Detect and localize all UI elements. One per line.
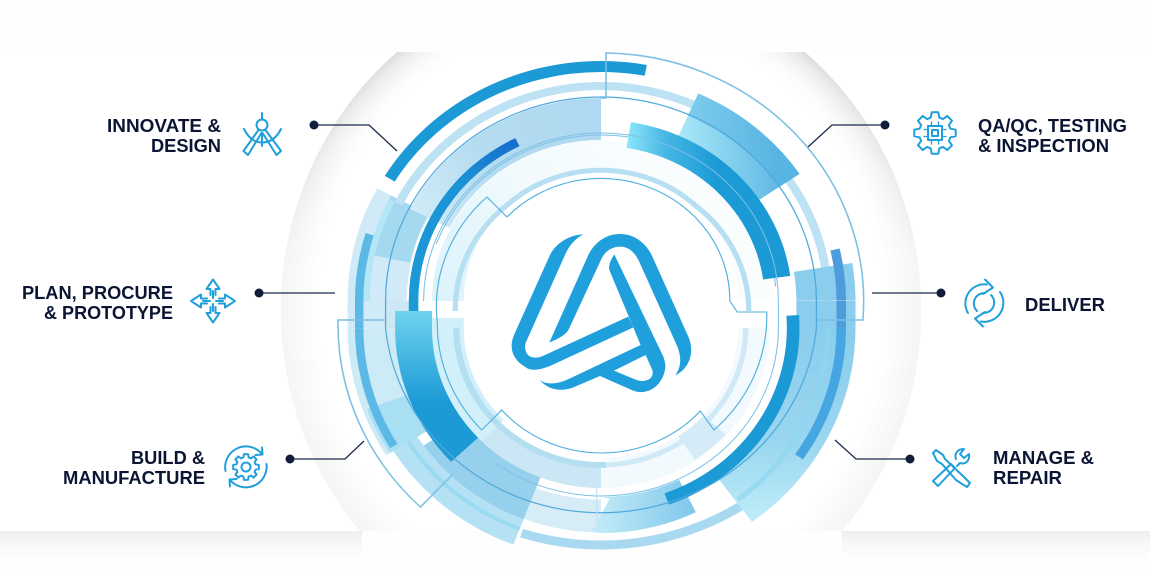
label: plan procure prototype: & PROTOTYPE xyxy=(44,302,173,323)
circular ring diagram xyxy=(338,53,864,557)
thin outline rings xyxy=(338,53,864,523)
leader: innovate xyxy=(310,120,397,151)
label: qa qc testing inspection: QA/QC, TESTING xyxy=(978,115,1127,136)
icon: gear with chip xyxy=(914,112,956,154)
label: plan procure prototype xyxy=(22,282,173,323)
label: qa qc testing inspection xyxy=(978,115,1127,156)
label: innovate and design xyxy=(107,115,221,156)
icon: four arrows xyxy=(191,280,235,322)
lower half rings xyxy=(359,99,843,557)
leader: manage xyxy=(835,440,914,464)
logo xyxy=(512,234,691,392)
icon: circular arrows xyxy=(965,280,1003,326)
label: innovate and design: DESIGN xyxy=(151,135,221,156)
label: manage and repair: REPAIR xyxy=(993,467,1062,488)
label: build and manufacture xyxy=(63,447,205,488)
label: deliver: DELIVER xyxy=(1025,294,1105,315)
icon: compass xyxy=(244,113,281,155)
leader: plan xyxy=(254,288,335,298)
icon: crossed tools xyxy=(933,449,970,487)
label: manage and repair xyxy=(993,447,1094,488)
icon: gear with cycle arrows xyxy=(225,446,267,487)
label: build and manufacture: MANUFACTURE xyxy=(63,467,205,488)
leader: build xyxy=(286,441,364,464)
label: innovate and design: INNOVATE & xyxy=(107,115,221,136)
upper half rings xyxy=(343,57,859,545)
label: manage and repair: MANAGE & xyxy=(993,447,1094,468)
leader: qa qc xyxy=(808,120,890,147)
label: qa qc testing inspection: & INSPECTION xyxy=(978,135,1109,156)
label: plan procure prototype: PLAN, PROCURE xyxy=(22,282,173,303)
leader: deliver xyxy=(872,288,946,298)
label: build and manufacture: BUILD & xyxy=(131,447,205,468)
